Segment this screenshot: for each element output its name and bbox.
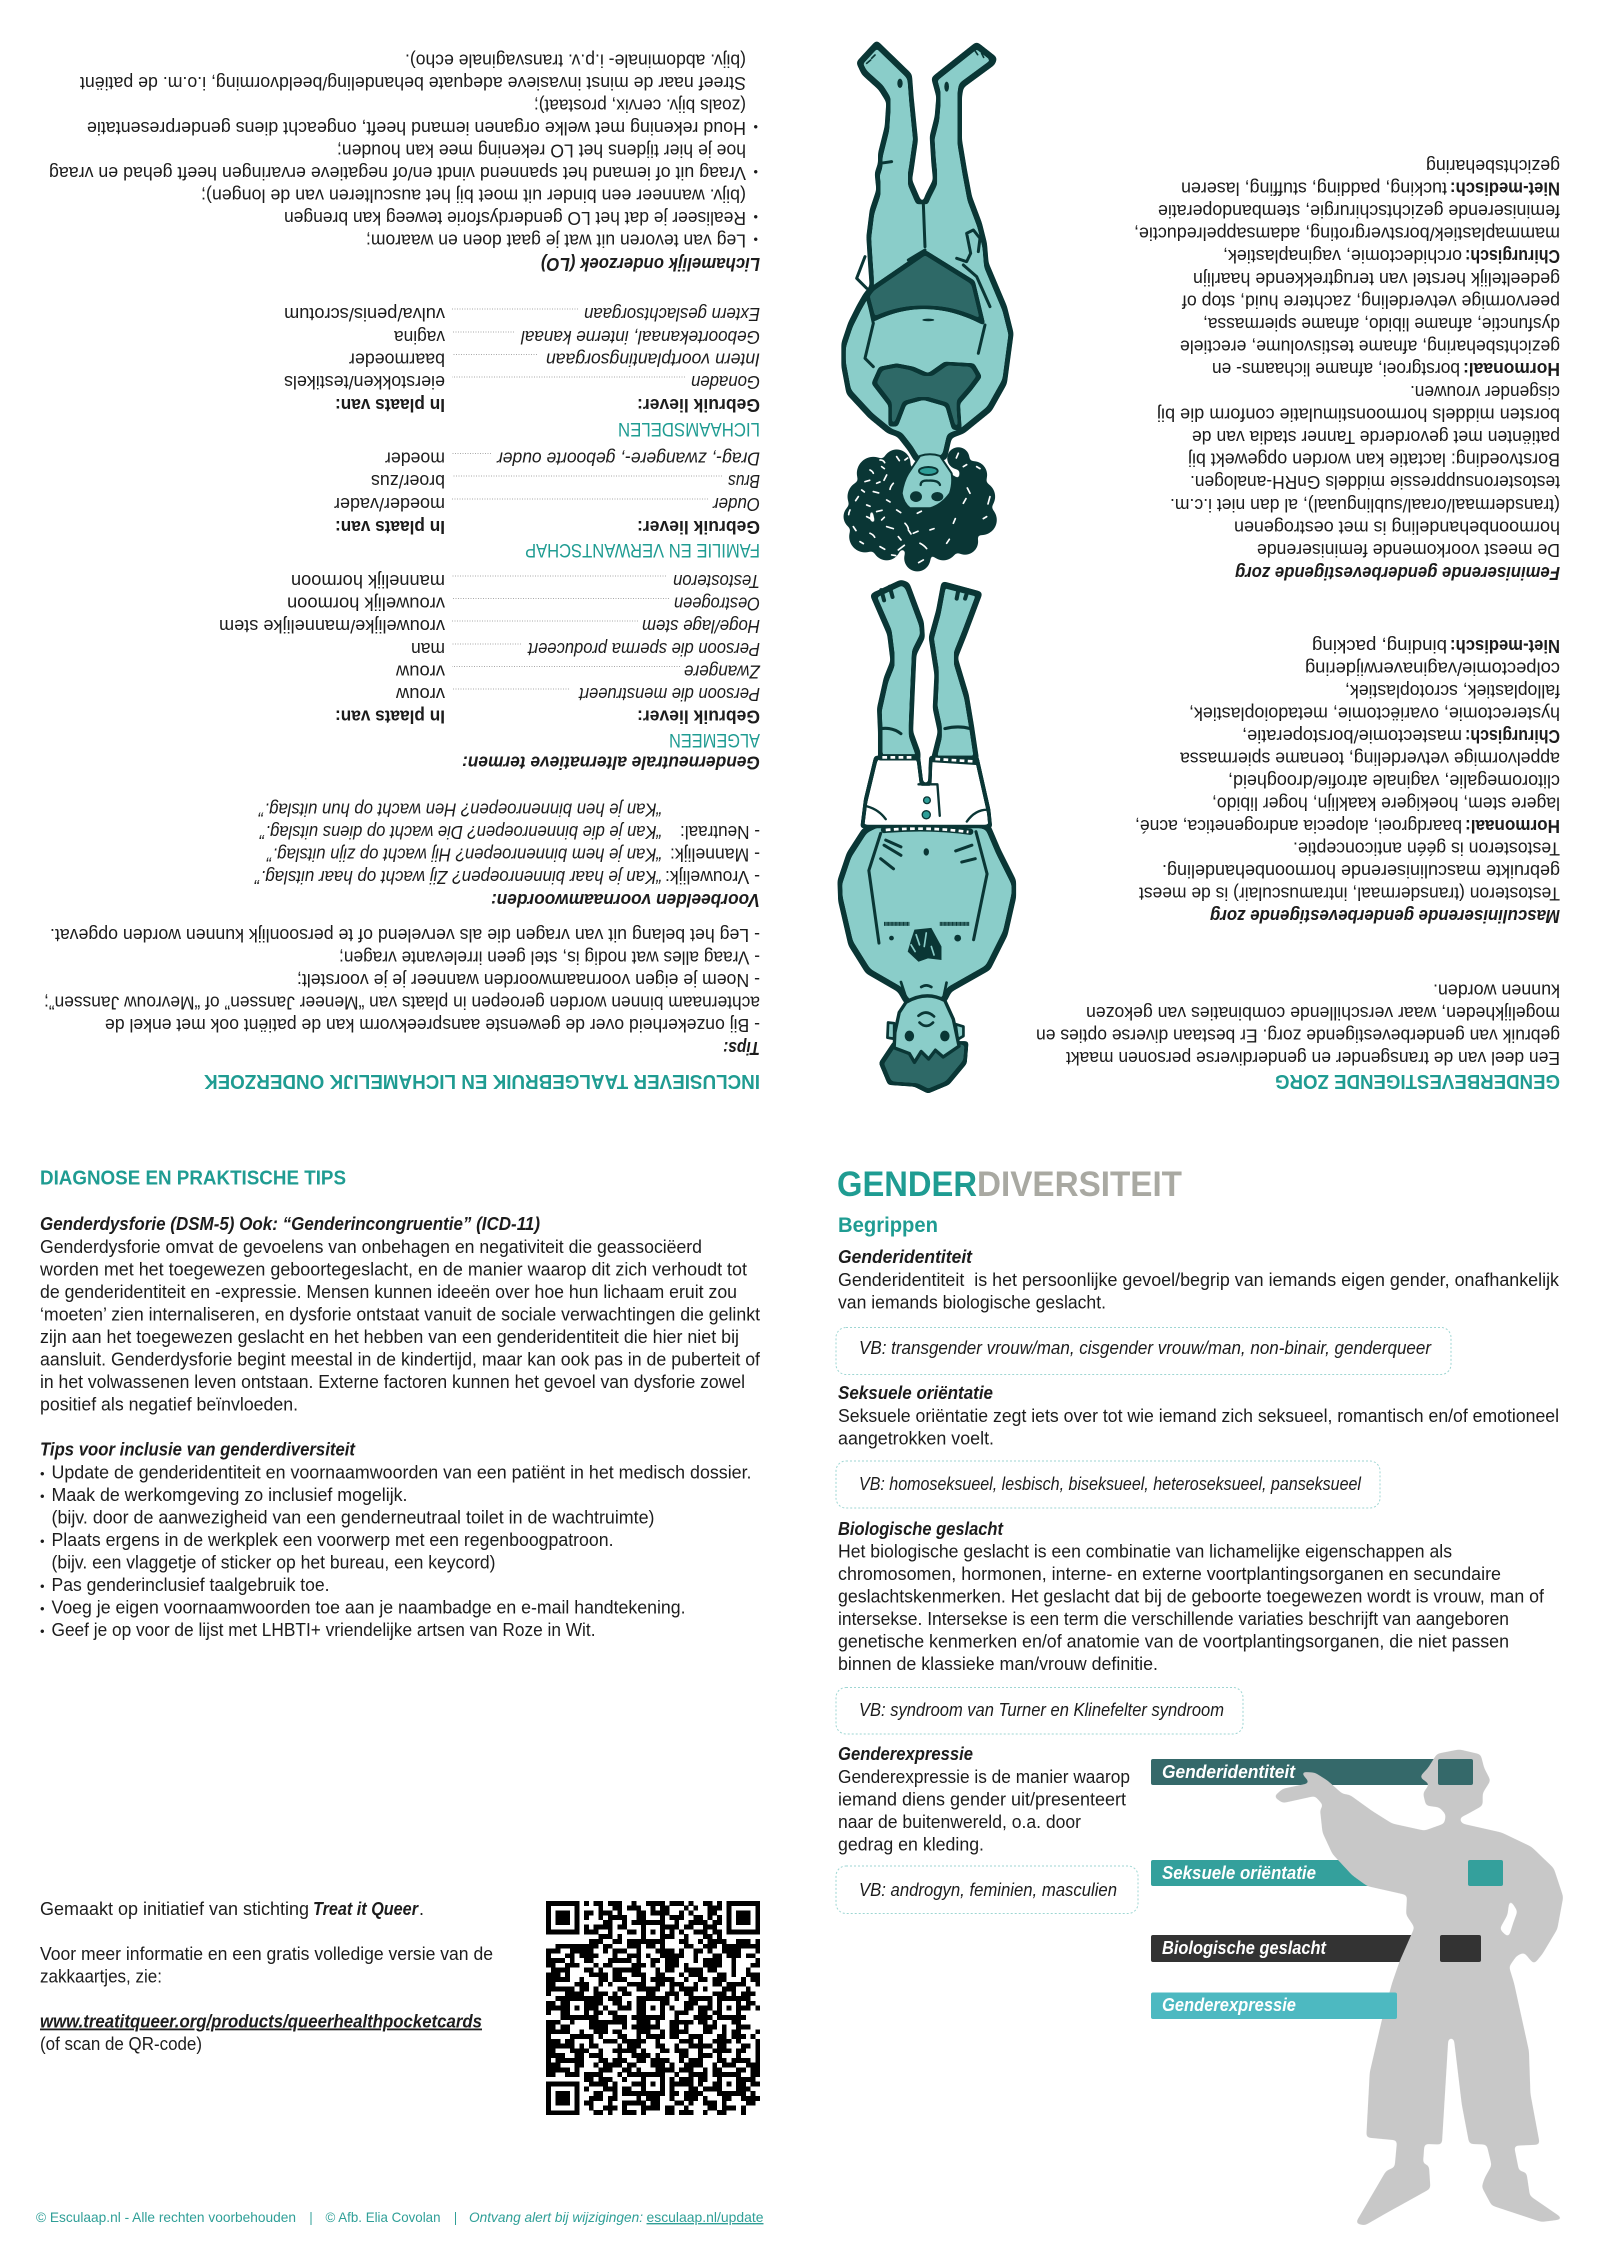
text block: feminiserende zorg xyxy=(1134,156,1560,583)
text block: masculiniserende zorg: Masculiniserende genderbevestigende zorg xyxy=(1210,906,1560,926)
text block: feminiserende zorg: hormoonbehandeling is met oestrogenen xyxy=(1234,517,1560,537)
neck details xyxy=(901,982,947,1001)
text block: tips voor inclusie: • xyxy=(40,1466,45,1481)
heading: lichaamsdelen: LICHAAMSDELEN xyxy=(618,418,760,439)
text block: tips: - Noem je eigen voornaamwoorden wanneer je je voorstelt; xyxy=(297,970,760,990)
table: genderneutrale alternatieve termen: Zwangere xyxy=(684,662,761,682)
text block: lichamelijk onderzoek: (bijv. abdominale- i.p.v. transvaginale echo). xyxy=(405,50,746,70)
table: genderneutrale alternatieve termen: Gebruik liever: xyxy=(637,517,760,537)
callout: voorbeelden seksuele orientatie: VB: homoseksueel, lesbisch, biseksueel, heteroseksueel, panseksueel xyxy=(859,1474,1362,1494)
table: genderneutrale alternatieve termen: Ouder xyxy=(712,494,760,514)
text block: feminiserende zorg: Hormonaal: xyxy=(1463,359,1560,379)
text block: feminiserende zorg: patiënten met gevorderde Tanner stadia van de xyxy=(1192,427,1560,447)
text block: tips voor inclusie: • xyxy=(40,1534,45,1548)
text block: voorbeelden voornaamwoorden: Voorbeelden voornaamwoorden: xyxy=(491,890,760,910)
text block: introduction: kunnen worden. xyxy=(1433,980,1560,1000)
text block: lichamelijk onderzoek: (bijv. wanneer een binder uit moet bij het ausculteren van de longen); xyxy=(201,186,746,206)
text block: masculiniserende zorg: appelvormige vetverdeling, toename spiermassa xyxy=(1179,748,1560,768)
text block: biologische geslacht: binnen de klassieke man/vrouw definitie. xyxy=(838,1654,1158,1674)
text block: masculiniserende zorg: falloplastiek, scrotoplastiek, xyxy=(1345,681,1560,701)
text block: lichamelijk onderzoek: Houd rekening met welke organen iemand heeft, ongeacht diens genderpresentatie xyxy=(87,118,746,138)
bar: genderexpressie: Genderexpressie xyxy=(1162,1995,1296,2015)
text block: biologische geslacht: chromosomen, hormonen, interne- en externe voortplantingsorganen en secundaire xyxy=(838,1564,1501,1584)
text block: feminiserende zorg: borsten middels hormoonstimulatie conform die bij xyxy=(1157,404,1560,424)
text block: genderexpressie: Genderexpressie is de manier waarop xyxy=(838,1767,1130,1787)
text block: lichamelijk onderzoek: • xyxy=(753,210,758,224)
marker: chest xyxy=(1468,1860,1503,1886)
text block: biologische geslacht xyxy=(838,1519,1545,1674)
text block: tips voor inclusie: Plaats ergens in de werkplek een voorwerp met een regenboogpatroon. xyxy=(52,1530,614,1550)
text block: genderdysforie: aansluit. Genderdysforie begint meestal in de kindertijd, maar kan ook pas in de puberteit of xyxy=(40,1350,761,1370)
table: genderneutrale alternatieve termen: baarmoeder xyxy=(349,350,445,370)
text block: tips voor inclusie: Pas genderinclusief taalgebruik toe. xyxy=(52,1575,330,1595)
text block: masculiniserende zorg: colpectomie/vaginaverwijdering xyxy=(1305,658,1560,678)
text block: feminiserende zorg: gedeeltelijk herstel van terugtrekkende haarlijn xyxy=(1193,269,1560,289)
text block: masculiniserende zorg: baardgroei, alopecia androgenetica, acné, xyxy=(1135,816,1462,836)
text block: seksuele orientatie xyxy=(838,1383,1559,1448)
illustration: figure with shorts and short hair xyxy=(839,582,1014,1092)
footer: copyright line: Ontvang alert bij wijzigingen: xyxy=(469,2209,643,2225)
table: genderneutrale alternatieve termen: moeder xyxy=(385,448,445,468)
hair xyxy=(881,1043,967,1092)
table: genderneutrale alternatieve termen: Persoon die sperma produceert xyxy=(527,639,760,659)
briefs xyxy=(867,252,983,323)
table: genderneutrale alternatieve termen: Testosteron xyxy=(673,571,760,591)
text block: voorbeelden voornaamwoorden: - Vrouwelijk: xyxy=(665,867,760,887)
table: genderneutrale alternatieve termen: man xyxy=(411,639,445,659)
hair xyxy=(843,447,997,572)
callout: voorbeelden biologische geslacht xyxy=(836,1688,1243,1734)
text block: genderdysforie: in het volwassenen leven ontstaan. Externe factoren kunnen het gevoel van dysforie zowel xyxy=(40,1372,745,1392)
text block: lichamelijk onderzoek: Lichamelijk onderzoek (LO) xyxy=(541,254,760,274)
callout: voorbeelden genderidentiteit xyxy=(836,1328,1451,1374)
text block: introduction xyxy=(1036,980,1560,1068)
text block: tips voor inclusie: • xyxy=(40,1488,45,1504)
text block: lichamelijk onderzoek: Leg van tevoren uit wat je gaat doen en waarom; xyxy=(366,230,746,250)
table: genderneutrale alternatieve termen xyxy=(219,304,761,772)
label: biologische geslacht: Biologische geslacht xyxy=(1162,1938,1327,1958)
panel: genderbevestigende zorg xyxy=(1036,156,1560,1092)
footer: copyright line: © Afb. Elia Covolan xyxy=(326,2209,440,2225)
text block: feminiserende zorg: gezichtsbeharing xyxy=(1426,156,1560,176)
callout: voorbeelden genderexpressie xyxy=(836,1866,1138,1914)
text block: biologische geslacht: genetische kenmerken en/of anatomie van de voortplantingsorganen, die niet passen xyxy=(838,1632,1509,1652)
text block: credits and link: Treat it Queer xyxy=(313,1899,419,1919)
short seams and buttons xyxy=(867,784,987,822)
table: genderneutrale alternatieve termen: Gonaden xyxy=(691,372,760,392)
text block: masculiniserende zorg: binding, packing xyxy=(1312,636,1447,656)
diagram: silhouette with labelled bars xyxy=(1151,1749,1564,2226)
text block: tips voor inclusie: • xyxy=(40,1578,45,1594)
text block: biologische geslacht: intersekse. Intersekse is een term die verschillende variaties beschrijft van aangeboren xyxy=(838,1609,1509,1629)
text block: masculiniserende zorg: Testosteron is géén anticonceptie. xyxy=(1293,838,1560,858)
text block: introduction: Een deel van de transgender en genderdiverse personen maakt xyxy=(1066,1048,1560,1068)
text block: feminiserende zorg: borstgroei, afname lichaams- en xyxy=(1212,359,1460,379)
text block: biologische geslacht: Het biologische geslacht is een combinatie van lichamelijke eigenschappen als xyxy=(838,1542,1452,1562)
text block: tips xyxy=(44,925,760,1058)
text block: tips voor inclusie: Geef je op voor de lijst met LHBTI+ vriendelijke artsen van Roze in Wit. xyxy=(52,1620,596,1640)
text block: genderdysforie: ‘moeten’ zien internaliseren, en dysforie ontstaat vanuit de sociale verwachtingen die gelinkt xyxy=(40,1304,760,1324)
text block: tips: - Vraag alles wat nodig is, stel geen irrelevante vragen; xyxy=(339,948,760,968)
arm lines and details xyxy=(869,727,987,943)
marker: head xyxy=(1438,1759,1473,1785)
bar: genderidentiteit xyxy=(1151,1759,1451,1785)
text block: genderexpressie: iemand diens gender uit/presenteert xyxy=(838,1790,1126,1810)
text block: masculiniserende zorg: Hormonaal: xyxy=(1465,816,1560,836)
silhouette figure xyxy=(1274,1749,1564,2226)
text block: genderexpressie: Genderexpressie xyxy=(838,1744,973,1764)
heading: begrippen: Begrippen xyxy=(838,1214,938,1237)
text block: masculiniserende zorg: Chirurgisch: xyxy=(1465,726,1560,746)
text block: genderidentiteit: van iemands biologische geslacht. xyxy=(838,1292,1106,1312)
bar: biologische geslacht xyxy=(1151,1935,1441,1962)
heading: familie en verwantschap: FAMILIE EN VERWANTSCHAP xyxy=(525,539,760,560)
text block: feminiserende zorg: orchidectomie, vaginaplastiek, xyxy=(1223,246,1462,266)
top xyxy=(873,363,980,428)
text block: lichamelijk onderzoek: • xyxy=(753,164,758,180)
table: genderneutrale alternatieve termen: Hoge/lage stem xyxy=(642,616,760,636)
text block: voorbeelden voornaamwoorden xyxy=(254,800,760,910)
text block: biologische geslacht: geslachtskenmerken. Het geslacht dat bij de geboorte toegewezen wordt is vrouw, man of xyxy=(838,1586,1545,1606)
text block: lichamelijk onderzoek xyxy=(49,50,760,274)
text block: tips: achternaam binnen worden geroepen in plaats van “Meneer Janssen” of “Mevrouw Janssen”; xyxy=(44,992,760,1012)
text block: feminiserende zorg: Feminiserende genderbevestigende zorg xyxy=(1235,563,1560,583)
footer: copyright line: © Esculaap.nl - Alle rechten voorbehouden xyxy=(36,2209,296,2225)
hand and arm lines xyxy=(857,230,990,367)
table: genderneutrale alternatieve termen: Genderneutrale alternatieve termen: xyxy=(462,752,760,772)
callout: voorbeelden genderexpressie: VB: androgyn, feminien, masculien xyxy=(859,1880,1117,1900)
panel: inclusiever taalgebruik en lichamelijk onderzoek xyxy=(44,50,761,1092)
text block: credits and link: (of scan de QR-code) xyxy=(40,2034,202,2054)
text block: genderdysforie: Genderdysforie omvat de gevoelens van onbehagen en negativiteit die geassociëerd xyxy=(40,1237,702,1257)
face details xyxy=(919,467,938,475)
table: genderneutrale alternatieve termen: mannelijk hormoon xyxy=(291,571,445,591)
text block: genderidentiteit xyxy=(838,1247,1560,1312)
text block: tips voor inclusie: Maak de werkomgeving zo inclusief mogelijk. xyxy=(52,1485,408,1505)
illustration: figure with curly hair and underwear xyxy=(843,43,1012,572)
text block: tips voor inclusie: Update de genderidentiteit en voornaamwoorden van een patiënt in het medisch dossier. xyxy=(52,1462,752,1482)
callout: voorbeelden seksuele orientatie xyxy=(836,1461,1380,1508)
text block: tips: Tips: xyxy=(723,1038,760,1058)
text block: feminiserende zorg: De meest voorkomende feminiserende xyxy=(1257,540,1560,560)
text block: genderdysforie: worden met het toegewezen geboortegeslacht, en de manier waarop dit zich verhoudt tot xyxy=(39,1260,747,1280)
panel: upside-down top half of the folded card xyxy=(44,50,1560,1092)
text block: feminiserende zorg: peervormige vetverdeling, zachtere huid, stop of xyxy=(1181,291,1560,311)
table: genderneutrale alternatieve termen: vrouw xyxy=(395,662,445,682)
table: genderneutrale alternatieve termen: Intern voortplantingsorgaan xyxy=(546,350,760,370)
table: genderneutrale alternatieve termen: broer/zus xyxy=(371,471,445,491)
text block: tips voor inclusie: Voeg je eigen voornaamwoorden toe aan je naambadge en e-mail handtekening. xyxy=(52,1598,686,1618)
text block: introduction: mogelijkheden, waar verschillende combinaties van gekozen xyxy=(1086,1003,1560,1023)
text block: lichamelijk onderzoek: (zoals bijv. cervix, prostaat); xyxy=(534,96,746,116)
text block: credits and link: www.treatitqueer.org/products/queerhealthpocketcards xyxy=(40,2012,482,2032)
text block: credits and link: zakkaartjes, zie: xyxy=(40,1966,162,1986)
table: genderneutrale alternatieve termen: vrouw xyxy=(395,684,445,704)
text block: feminiserende zorg: mammaplastiek/borstvergroting, adamsappelreductie, xyxy=(1134,224,1560,244)
table: genderneutrale alternatieve termen: Oestrogeen xyxy=(674,594,760,614)
text block: credits and link: Voor meer informatie en een gratis volledige versie van de xyxy=(40,1944,493,1964)
text block: tips voor inclusie: (bijv. door de aanwezigheid van een genderneutraal toilet in de wachtruimte) xyxy=(52,1508,654,1528)
text block: tips voor inclusie xyxy=(40,1440,752,1640)
table: genderneutrale alternatieve termen: vagina xyxy=(393,327,445,347)
text block: feminiserende zorg: cisgender vrouwen. xyxy=(1410,382,1560,402)
text block: lichamelijk onderzoek: Vraag uit of iemand het spannend vindt en/of negatieve ervaringen heeft gehad en vraag xyxy=(49,163,746,183)
text block: masculiniserende zorg: gebruikte masculiniserende hormoonbehandeling. xyxy=(1162,861,1560,881)
head xyxy=(894,996,959,1062)
text block: feminiserende zorg: dysfunctie, afname libido, afname spiermassa, xyxy=(1203,314,1560,334)
marker: pelvis xyxy=(1440,1935,1481,1962)
heading: diagnose: DIAGNOSE EN PRAKTISCHE TIPS xyxy=(40,1168,346,1190)
title xyxy=(837,1165,1182,1204)
table: genderneutrale alternatieve termen: Geboortekanaal, interne kanaal xyxy=(520,327,760,347)
text block: genderidentiteit: Genderidentiteit is het persoonlijke gevoel/begrip van iemands eigen gender, onafhankelijk xyxy=(838,1270,1560,1290)
text block: feminiserende zorg: Niet-medisch: xyxy=(1450,178,1560,198)
text block: voorbeelden voornaamwoorden: - Neutraal: xyxy=(680,822,760,842)
text block: genderdysforie: Genderdysforie (DSM-5) Ook: “Genderincongruentie” (ICD-11) xyxy=(40,1214,540,1234)
text block: genderidentiteit: Genderidentiteit xyxy=(838,1247,973,1267)
text block: genderexpressie xyxy=(838,1744,1130,1854)
heading: genderbevestigende zorg: GENDERBEVESTIGENDE ZORG xyxy=(1275,1070,1560,1092)
text block: genderexpressie: naar de buitenwereld, o.a. door xyxy=(838,1812,1081,1832)
callout: voorbeelden biologische geslacht: VB: syndroom van Turner en Klinefelter syndroom xyxy=(859,1700,1224,1720)
panel: genderdiversiteit begrippen xyxy=(836,1165,1560,1914)
table: genderneutrale alternatieve termen: In plaats van: xyxy=(335,395,445,415)
text block: feminiserende zorg: Chirurgisch: xyxy=(1465,246,1560,266)
text block: voorbeelden voornaamwoorden: “Kan je hem binnenroepen? Hij wacht op zijn uitslag.” xyxy=(266,844,662,864)
face details xyxy=(919,1013,934,1026)
toes xyxy=(876,584,975,600)
title: GENDER xyxy=(837,1165,977,1204)
table: genderneutrale alternatieve termen: In plaats van: xyxy=(335,517,445,537)
text block: genderdysforie: positief als negatief beïnvloeden. xyxy=(40,1394,298,1414)
label: seksuele orientatie: Seksuele oriëntatie xyxy=(1162,1863,1316,1883)
left leg xyxy=(872,582,923,759)
text block: masculiniserende zorg: hysterectomie, ovariëctomie, metadoioplastiek, xyxy=(1189,704,1560,724)
text block: masculiniserende zorg: lagere stem, hoekigere kaaklijn, hoger libido, xyxy=(1212,794,1560,814)
table: genderneutrale alternatieve termen: vulva/penis/scrotum xyxy=(284,304,445,324)
text block: tips: - Leg het belang uit van vragen die als vervelend of te persoonlijk kunnen worden opgevat. xyxy=(50,925,760,945)
table: genderneutrale alternatieve termen: Persoon die menstrueert xyxy=(578,684,760,704)
footer: copyright line: esculaap.nl/update xyxy=(646,2209,764,2225)
text block: masculiniserende zorg xyxy=(1135,636,1560,926)
text block: credits and link: . xyxy=(419,1899,424,1919)
text block: voorbeelden voornaamwoorden: “Kan je hen binnenroepen? Hen wacht op hun uitslag.” xyxy=(258,800,662,820)
text block: voorbeelden voornaamwoorden: - Mannelijk: xyxy=(670,844,760,864)
text block: masculiniserende zorg: Niet-medisch: xyxy=(1450,636,1560,656)
body outline xyxy=(843,43,1012,460)
heading: algemeen: ALGEMEEN xyxy=(669,729,760,750)
table: genderneutrale alternatieve termen: vrouwelijke/mannelijke stem xyxy=(219,616,445,636)
text block: tips voor inclusie: Tips voor inclusie van genderdiversiteit xyxy=(40,1440,356,1460)
text block: tips voor inclusie: • xyxy=(40,1624,45,1638)
callout: voorbeelden genderidentiteit: VB: transgender vrouw/man, cisgender vrouw/man, non-binair, genderqueer xyxy=(859,1338,1432,1358)
ears xyxy=(887,1023,963,1039)
table: genderneutrale alternatieve termen: In plaats van: xyxy=(335,706,445,726)
label: genderidentiteit: Genderidentiteit xyxy=(1162,1762,1296,1782)
text block: lichamelijk onderzoek: Streef naar de minst invasieve adequate behandeling/beeldvorming, i.o.m. de patiënt xyxy=(80,73,746,93)
table: genderneutrale alternatieve termen: Drag-, zwangere-, geboorte ouder xyxy=(496,448,760,468)
text block: seksuele orientatie: Seksuele oriëntatie zegt iets over tot wie iemand zich seksueel, romantisch en/of emotioneel xyxy=(838,1406,1559,1426)
table: genderneutrale alternatieve termen: moeder/vader xyxy=(334,494,445,514)
text block: masculiniserende zorg: Testosteron (transdermaal, intramusculair) is de meest xyxy=(1139,884,1560,904)
text block: credits and link xyxy=(40,1899,493,2054)
table: genderneutrale alternatieve termen: eierstokken/testikels xyxy=(284,372,445,392)
face xyxy=(902,454,952,508)
title: DIVERSITEIT xyxy=(977,1165,1182,1204)
panel: diagnose en praktische tips xyxy=(39,1168,761,1640)
text block: genderexpressie: gedrag en kleding. xyxy=(838,1834,984,1854)
text block: masculiniserende zorg: clitoromegalie, vaginale atrofie/droogheid, xyxy=(1228,771,1560,791)
text block: feminiserende zorg: tucking, padding, stuffing, laseren xyxy=(1181,178,1447,198)
shorts xyxy=(862,757,990,827)
heading: inclusiever taalgebruik: INCLUSIEVER TAALGEBRUIK EN LICHAMELIJK ONDERZOEK xyxy=(203,1070,760,1092)
table: genderneutrale alternatieve termen: Gebruik liever: xyxy=(637,395,760,415)
text block: tips voor inclusie: (bijv. een vlaggetje of sticker op het bureau, een keycord) xyxy=(52,1552,496,1572)
bar: genderexpressie xyxy=(1151,1992,1397,2019)
text block: feminiserende zorg: testosteronsuppressie middels GnRH-analogen. xyxy=(1190,472,1560,492)
text block: feminiserende zorg: feminiserende gezichtschirurgie, stembandoperatie xyxy=(1158,201,1560,221)
text block: feminiserende zorg: Borstvoeding: lactatie kan worden opgewekt bij xyxy=(1188,450,1560,470)
text block: seksuele orientatie: Seksuele oriëntatie xyxy=(838,1383,993,1403)
text block: feminiserende zorg: gezichtsbeharing, afname testisvolume, erectiele xyxy=(1180,337,1560,357)
inner leg line xyxy=(880,162,925,260)
text block: lichamelijk onderzoek: • xyxy=(753,120,758,134)
text block: voorbeelden voornaamwoorden: “Kan je haar binnenroepen? Zij wacht op haar uitslag.” xyxy=(254,867,662,887)
text block: feminiserende zorg: (transdermaal/oraal/sublinguaal), al dan niet i.c.m. xyxy=(1170,495,1560,515)
text block: tips: - Bij onzekerheid over de gewenste aanspreekvorm kan de patiënt ook met enkel de xyxy=(105,1015,760,1035)
right leg xyxy=(931,583,980,759)
table: genderneutrale alternatieve termen: Extern geslachtsorgaan xyxy=(584,304,760,324)
text block: genderdysforie xyxy=(39,1214,761,1414)
text block: credits and link: Gemaakt op initiatief van stichting xyxy=(40,1899,309,1919)
table: genderneutrale alternatieve termen: Brus xyxy=(728,471,760,491)
text block: lichamelijk onderzoek: Realiseer je dat het LO genderdysforie teweeg kan brengen xyxy=(284,208,746,228)
text block: voorbeelden voornaamwoorden: “Kan je die binnenroepen? Die wacht op diens uitslag.” xyxy=(259,822,662,842)
text block: biologische geslacht: Biologische geslacht xyxy=(838,1519,1004,1539)
text block: introduction: gebruik van genderbevestigende zorg. Er bestaan diverse opties en xyxy=(1036,1026,1560,1046)
bar: seksuele orientatie xyxy=(1151,1860,1401,1886)
text block: seksuele orientatie: aangetrokken voelt. xyxy=(838,1428,994,1448)
text block: masculiniserende zorg: mastectomie/borstoperatie, xyxy=(1242,726,1462,746)
footer: copyright line xyxy=(36,2209,764,2225)
text block: genderdysforie: de genderidentiteit en -expressie. Mensen kunnen ideeën over hoe hun lichaam eruit zou xyxy=(40,1282,737,1302)
text block: genderdysforie: zijn aan het toegewezen geslacht en het hebben van een genderidentiteit die hier niet bij xyxy=(40,1327,739,1347)
text block: lichamelijk onderzoek: hoe je hier tijdens het LO rekening mee kan houden; xyxy=(337,140,746,160)
text block: lichamelijk onderzoek: • xyxy=(753,232,758,247)
torso and arms xyxy=(839,825,1014,1002)
table: genderneutrale alternatieve termen: vrouwelijk hormoon xyxy=(287,594,445,614)
qr code xyxy=(546,1901,760,2115)
text block: tips voor inclusie: • xyxy=(40,1601,45,1616)
table: genderneutrale alternatieve termen: Gebruik liever: xyxy=(637,706,760,726)
chest scars and hair xyxy=(884,918,969,930)
